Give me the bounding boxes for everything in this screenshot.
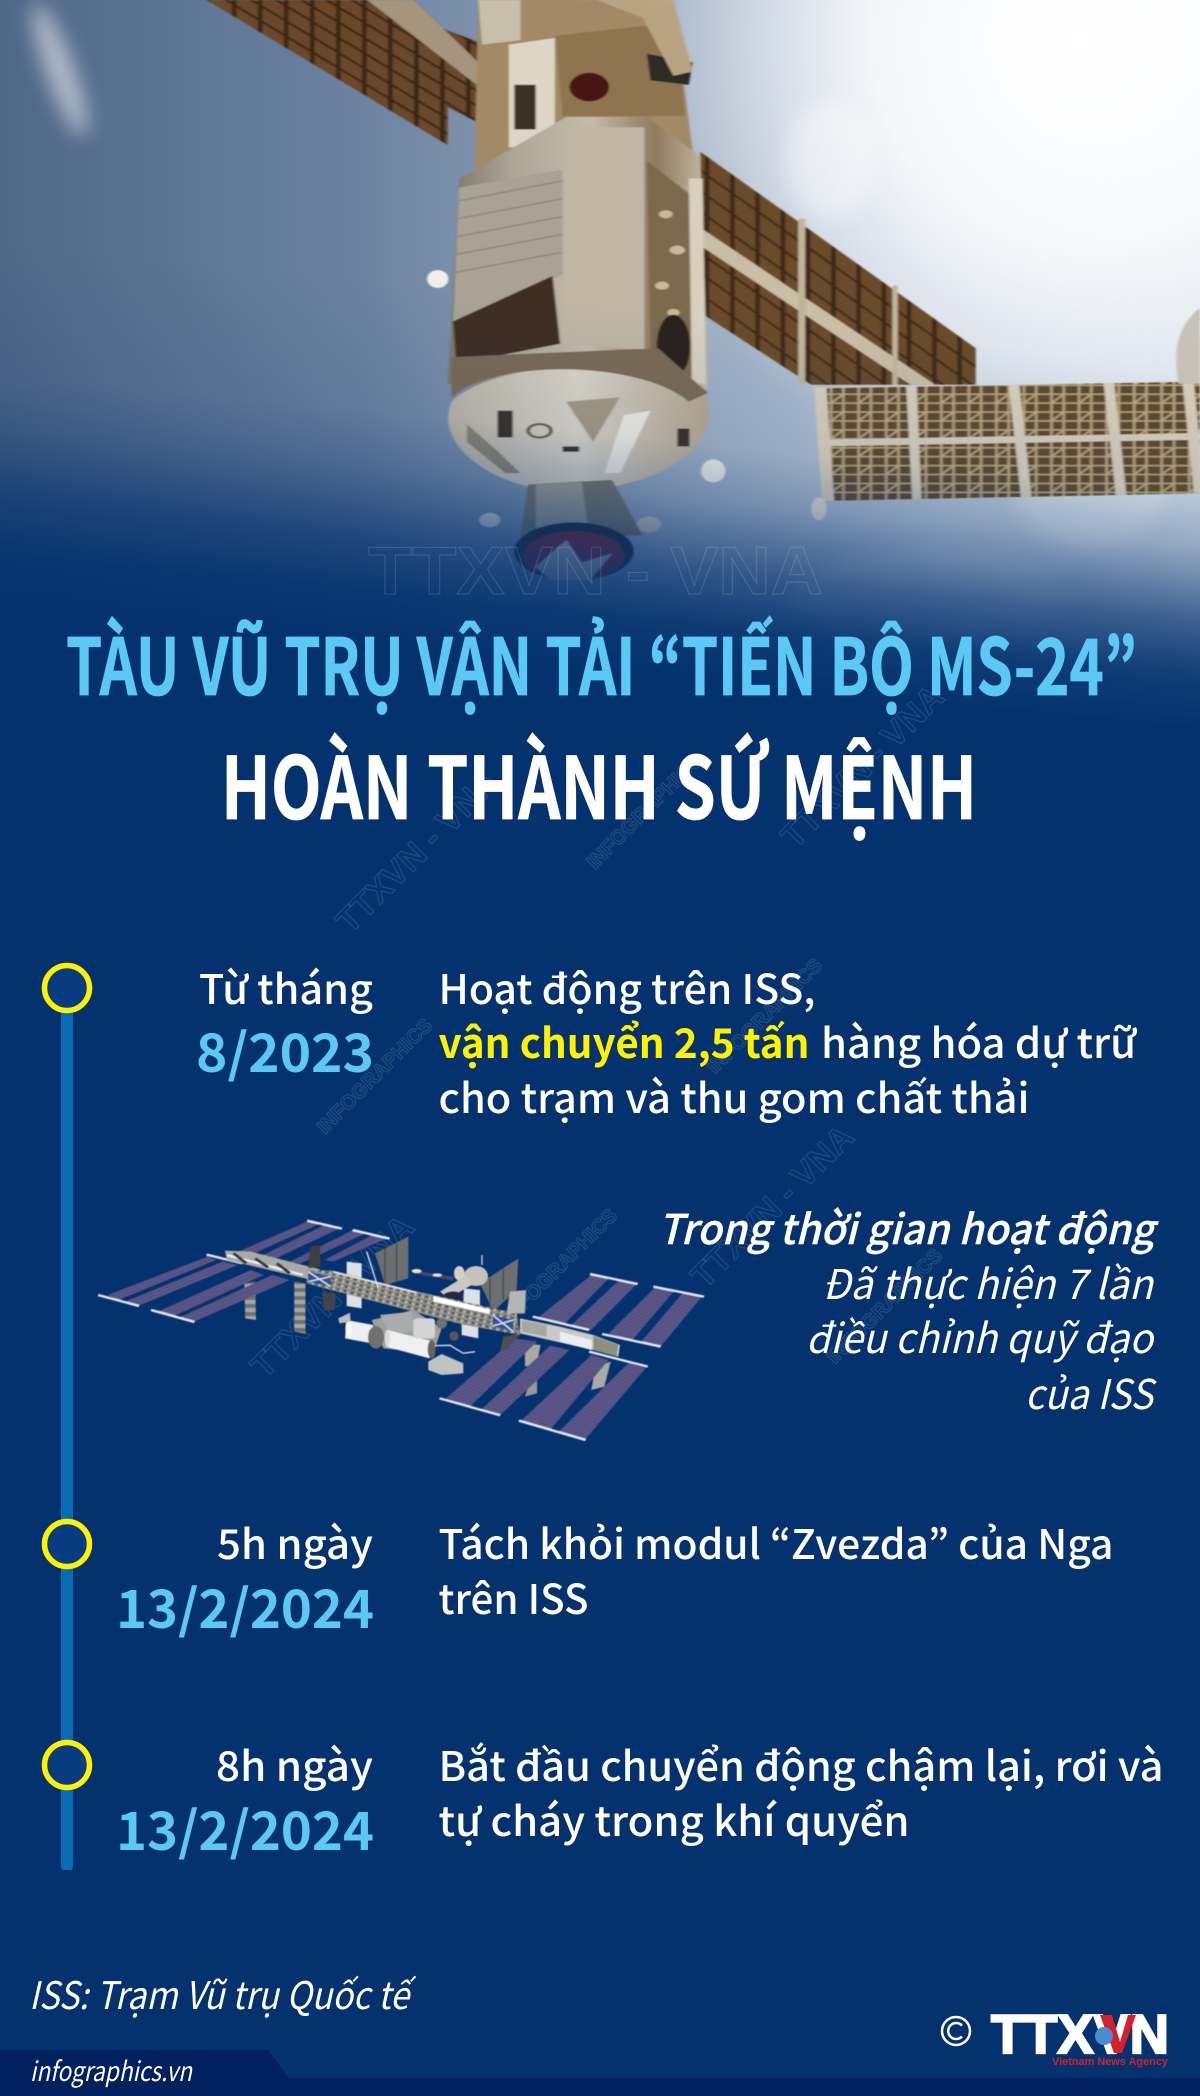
diagonal watermarks [244,678,952,1386]
footer band with tab [0,2050,1200,2096]
event text 1: Hoạt động trên ISS, [438,956,816,1016]
diagonal watermarks: INFOGRAPHICS [823,1245,947,1369]
russian segment [464,1266,488,1286]
central truss [307,1270,520,1335]
logo: TTXVN: TTXVN [991,2003,1169,2065]
radiators [347,1262,362,1278]
left solar panels [207,0,509,145]
diagonal watermarks: TTXVN - VNA [774,678,952,856]
watermark: TTXVN - VNA: TTXVN - VNA [368,533,823,609]
diagonal watermarks: TTXVN - VNA [329,763,507,941]
event text 2: trên ISS [438,1566,588,1626]
footnote: ISS definition: ISS: Trạm Vũ trụ Quốc tế [29,1965,417,2020]
note: trong thời gian hoạt động: của ISS [1025,1361,1157,1421]
array end bars [98,1221,704,1440]
left truss segment [225,1251,320,1280]
lattice panel [819,382,1200,501]
diagonal watermarks: TTXVN - VNA [684,1118,862,1296]
date: 5h ngày 13/2/2024: 13/2/2024 [116,1568,374,1644]
date: 5h ngày 13/2/2024: 5h ngày [217,1511,373,1571]
note: trong thời gian hoạt động [658,1196,1159,1421]
date: 8h ngày 13/2/2024 [116,1733,374,1866]
diagonal watermarks: TTXVN - VNA [244,1208,422,1386]
date: 8h ngày 13/2/2024: 8h ngày [216,1733,373,1793]
note: trong thời gian hoạt động: điều chỉnh quỹ đạo [806,1305,1156,1365]
diagonal watermarks: INFOGRAPHICS [703,955,827,1079]
date: từ tháng 8/2023 [196,956,374,1088]
date: 5h ngày 13/2/2024 [116,1511,374,1644]
illustration: international space station [98,1221,704,1440]
neck and nozzle [520,480,643,536]
diagonal watermarks: INFOGRAPHICS [498,1205,622,1329]
timeline marker 2 [44,1522,90,1566]
left solar arrays [108,1221,387,1322]
timeline line [61,1000,73,1870]
right solar arrays [446,1275,702,1440]
upper module [474,0,693,170]
event text 1 [438,956,1138,1125]
header photo: spacecraft over Earth [0,0,1200,760]
starboard truss [520,1318,620,1357]
title [66,606,1137,844]
right edge module [1176,308,1200,384]
event text 1: hàng hóa dự trữ [821,1010,1138,1070]
date: từ tháng 8/2023: Từ tháng [199,956,373,1016]
thruster blobs [701,459,726,483]
date: 8h ngày 13/2/2024: 13/2/2024 [116,1790,374,1866]
diagonal watermarks: INFOGRAPHICS [313,1015,437,1139]
timeline marker 3 [44,1742,90,1788]
event text 3: tự cháy trong khí quyển [438,1788,910,1848]
joints and arms [308,1245,321,1268]
event text 1: cho trạm và thu gom chất thải [438,1065,1030,1125]
event text 1: vận chuyển 2,5 tấn [438,1010,810,1070]
radiators [244,1282,256,1320]
date: từ tháng 8/2023: 8/2023 [196,1012,374,1088]
diagonal watermarks: INFOGRAPHICS [583,750,707,874]
event text 2: Tách khỏi modul “Zvezda” của Nga [438,1511,1114,1571]
event text 2 [438,1511,1114,1626]
gray PV panels behind truss [375,1237,408,1285]
event text 3: Bắt đầu chuyển động chậm lại, rơi và [438,1733,1164,1793]
right solar panels [700,152,976,385]
source url: infographics.vn [30,2050,193,2089]
event text 3 [438,1733,1164,1848]
dome [448,365,709,487]
note: trong thời gian hoạt động: Đã thực hiện 7 lần [822,1251,1155,1311]
title: HOÀN THÀNH SỨ MỆNH [221,719,977,844]
logo: TTXVN: Vietnam News Agency [1052,2056,1169,2068]
pressurized modules [372,1310,442,1353]
copyright symbol [942,2017,970,2045]
timeline marker 1 [44,966,90,1010]
note: trong thời gian hoạt động: Trong thời gian hoạt động [658,1196,1159,1256]
main cylinder [448,117,708,388]
